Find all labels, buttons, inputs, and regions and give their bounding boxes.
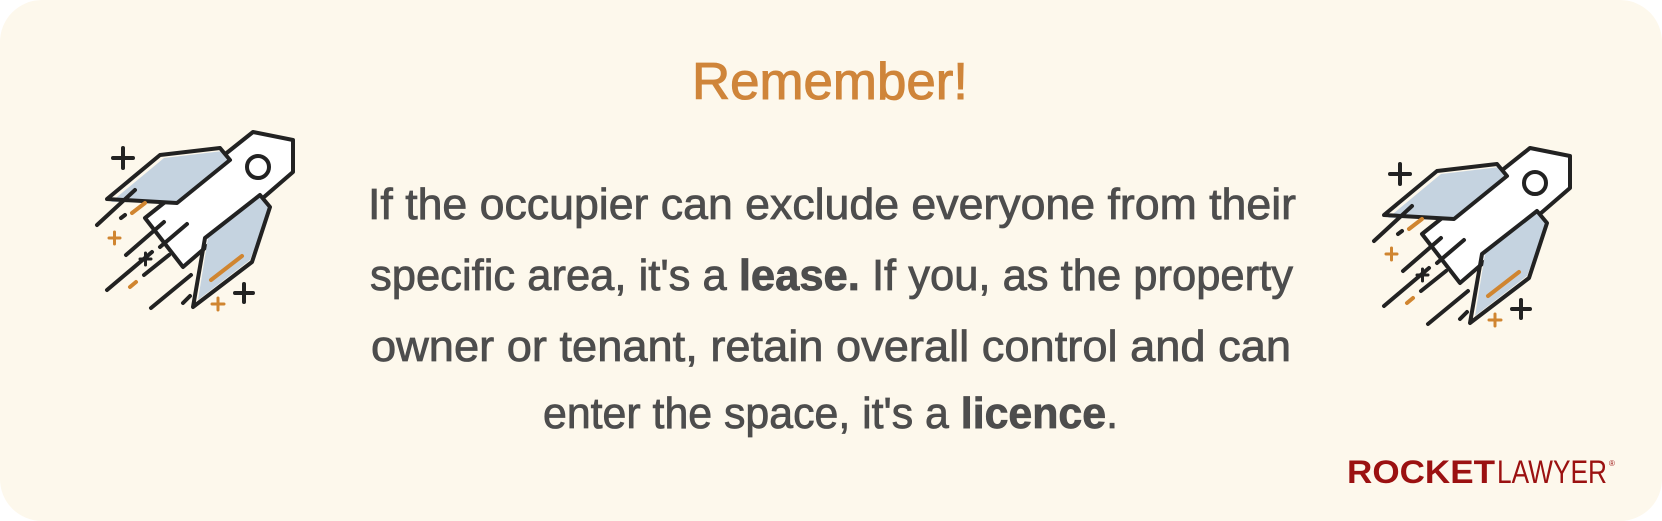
body text: specific area, it's a lease. If you, as the property [370, 251, 1293, 300]
body text: enter the space, it's a licence. [543, 389, 1118, 438]
body text [368, 180, 1296, 438]
icon: right rocket [1374, 148, 1570, 326]
logo: ROCKET [1347, 454, 1495, 490]
title: Remember! [692, 53, 968, 111]
logo: ® [1609, 459, 1615, 468]
logo [1347, 454, 1615, 490]
body text: If the occupier can exclude everyone from their [368, 180, 1296, 229]
body text: owner or tenant, retain overall control and can [371, 322, 1291, 371]
logo: LAWYER [1497, 454, 1607, 490]
icon: left rocket [97, 132, 293, 310]
